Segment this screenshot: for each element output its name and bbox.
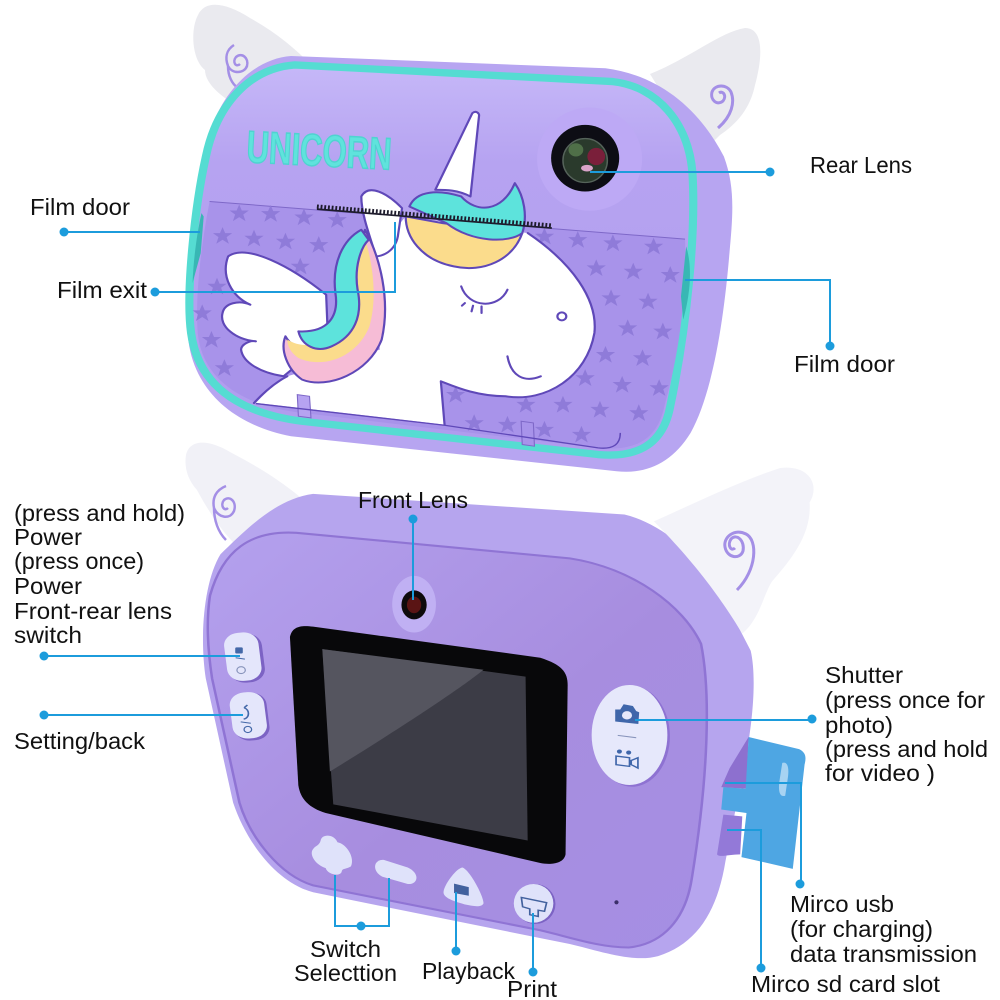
plus button (312, 836, 352, 875)
label: shutter: (press and hold (825, 736, 988, 762)
label: shutter: Shutter (825, 662, 903, 688)
label: shutter: photo) (825, 712, 893, 738)
unicorn mane (284, 230, 385, 382)
label: film door left: Film door (30, 194, 130, 220)
unicorn wing (222, 253, 328, 376)
left wing (193, 5, 312, 110)
callout: power button (40, 652, 240, 660)
speaker dot (614, 900, 619, 904)
left wing spiral (226, 45, 247, 88)
stars (193, 204, 680, 443)
label: switch selection: Selecttion (294, 960, 397, 986)
label: film door right: Film door (794, 351, 895, 377)
right wing spiral (725, 532, 754, 590)
playback button (444, 867, 483, 906)
callout: film exit (150, 222, 395, 296)
print button (514, 884, 555, 924)
bottom tabs (297, 395, 534, 446)
unicorn forelock (406, 183, 525, 268)
callout: micro sd slot (727, 830, 766, 972)
label: micro usb (790, 891, 977, 967)
camera body (203, 494, 805, 958)
label: power and lens switch (14, 500, 185, 648)
label: power and lens switch: Power (14, 524, 82, 550)
label: power and lens switch: Front-rear lens (14, 598, 172, 624)
callout: film door left (60, 228, 200, 236)
bottom edge shadow (256, 404, 620, 448)
label: shutter: for video ) (825, 760, 935, 786)
logo: UNICORN: UNICORN (245, 121, 393, 180)
label: power and lens switch: Power (14, 573, 82, 599)
unicorn horn (435, 112, 479, 196)
unicorn head (256, 216, 595, 425)
label: micro usb: data transmission (790, 941, 977, 967)
label: switch selection (294, 936, 397, 986)
shutter button (592, 685, 670, 787)
setting button (228, 691, 271, 742)
label: setting/back: Setting/back (14, 728, 146, 754)
callout: rear lens (590, 168, 774, 176)
teal ring and panel (189, 65, 693, 455)
callout: setting button (40, 710, 243, 720)
callout: film door right (685, 280, 834, 350)
unicorn eye (461, 286, 507, 313)
callout: micro usb (725, 783, 804, 888)
minus button (375, 860, 416, 884)
callout: switch selection (335, 875, 389, 930)
unicorn ear (361, 190, 402, 256)
callout: front lens (408, 514, 418, 600)
unicorn smile (507, 356, 541, 379)
callout: print (528, 913, 538, 976)
power button (223, 631, 266, 684)
label: micro sd slot: Mirco sd card slot (751, 971, 941, 997)
label: rear lens: Rear Lens (810, 152, 912, 178)
label: shutter: (press once for (825, 687, 985, 713)
film door notches (193, 213, 204, 283)
screen display (322, 649, 528, 841)
label: switch selection: Switch (310, 936, 381, 962)
left wing spiral (214, 486, 235, 540)
label: power and lens switch: (press and hold) (14, 500, 185, 526)
unicorn nostril (557, 312, 566, 320)
label: power and lens switch: switch (14, 622, 82, 648)
side door (717, 737, 805, 869)
callout: shutter (635, 714, 816, 724)
front lens (392, 576, 436, 633)
camera body (187, 56, 732, 472)
label: playback: Playback (422, 958, 515, 984)
label: film exit: Film exit (57, 277, 148, 303)
label: shutter (825, 662, 988, 786)
label: micro usb: (for charging) (790, 916, 933, 942)
star panel (197, 201, 685, 449)
camera: front view with screen (185, 443, 814, 958)
screen bezel (290, 626, 568, 864)
right wing spiral (712, 86, 733, 128)
right wing (650, 28, 760, 155)
camera: rear view with unicorn (187, 5, 760, 472)
film exit slot (317, 206, 552, 228)
right wing (654, 468, 814, 634)
label: front lens: Front Lens (358, 487, 468, 513)
callout: playback (452, 892, 460, 956)
label: micro usb: Mirco usb (790, 891, 894, 917)
inner panel (208, 533, 707, 948)
left wing (185, 443, 300, 545)
label: power and lens switch: (press once) (14, 548, 144, 574)
rear lens (537, 108, 642, 211)
